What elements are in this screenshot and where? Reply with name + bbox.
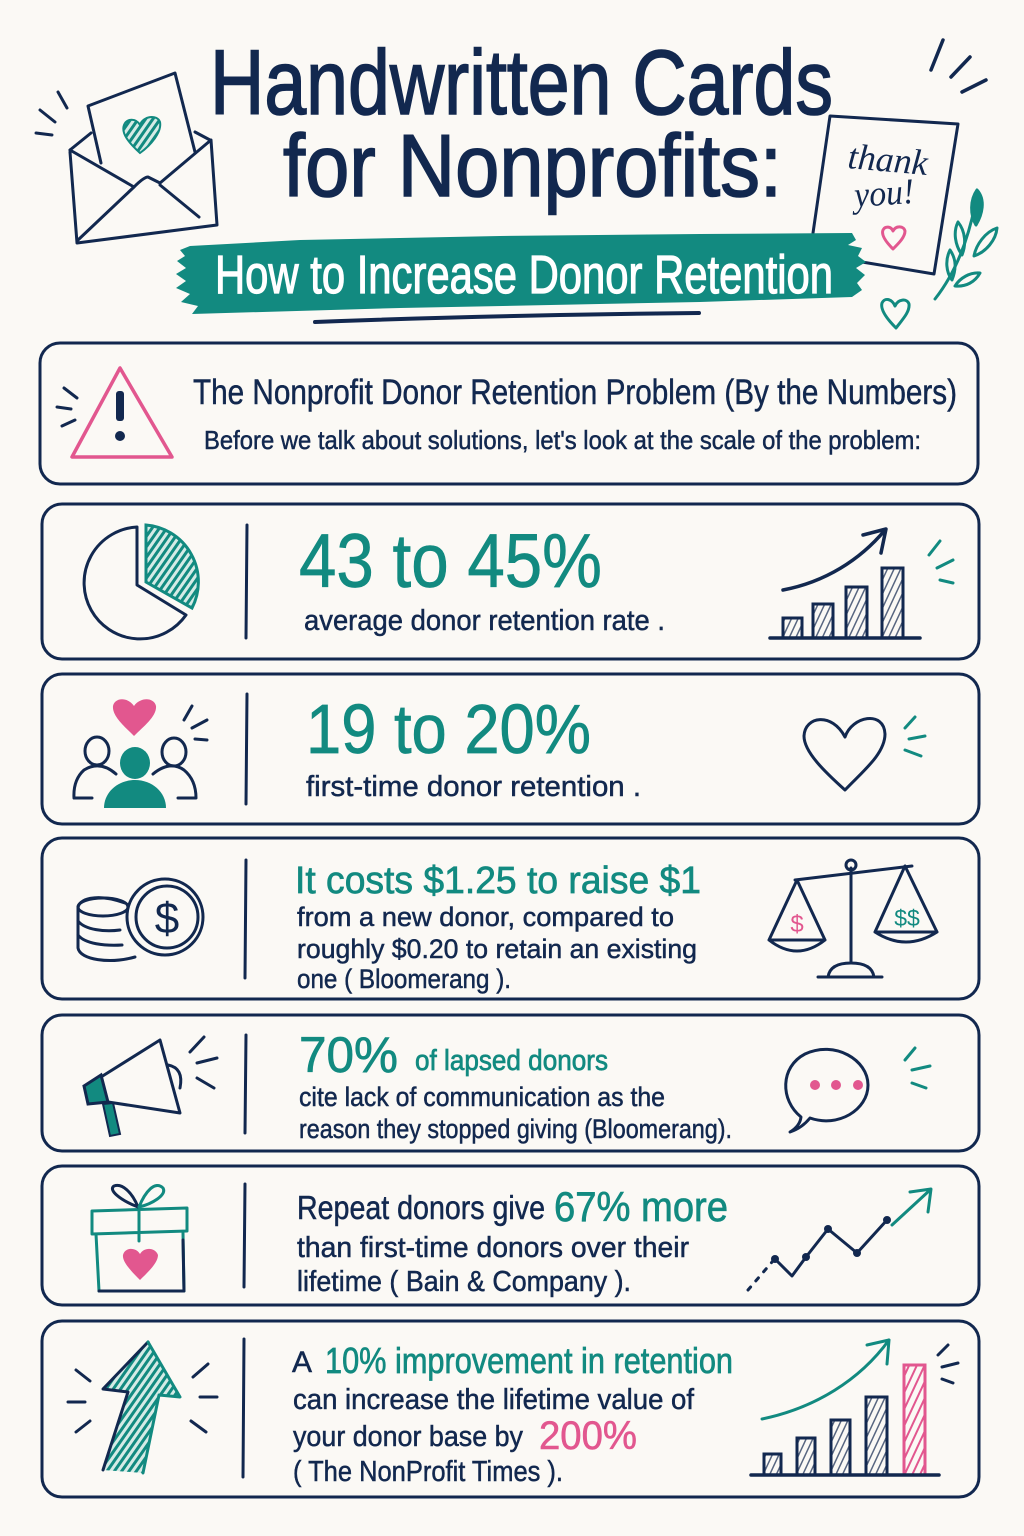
stat: 43 to 45% [299, 519, 602, 604]
stat line: Repeat donors give [297, 1189, 545, 1226]
body text: roughly $0.20 to retain an existing [297, 934, 697, 964]
icon: balance scale: $ [790, 911, 804, 938]
icon: pie chart [84, 525, 198, 639]
icon: thank you card: you! [850, 171, 915, 215]
title: for Nonprofits: [283, 116, 782, 215]
panel: first-time retention [42, 674, 979, 824]
icon: coins [78, 879, 203, 960]
stat heading [299, 1027, 608, 1083]
body text [293, 1384, 695, 1488]
icon: envelope with heart card [36, 73, 217, 243]
icon: leaf branch [935, 190, 997, 299]
icon: megaphone [84, 1037, 217, 1136]
panel: problem intro [40, 343, 978, 484]
icon: line chart [748, 1189, 931, 1290]
panel: ten percent improvement [42, 1321, 979, 1497]
body text: ( The NonProfit Times ). [293, 1456, 563, 1488]
icon: donors with heart [74, 699, 207, 808]
panel: repeat donors [42, 1166, 979, 1305]
icon: balance scale [769, 860, 937, 977]
body text: from a new donor, compared to [297, 902, 674, 932]
body text [297, 902, 697, 994]
icon: bar chart with arrow [751, 1340, 958, 1475]
body text: lifetime ( Bain & Company ). [297, 1266, 631, 1298]
icon: small teal heart [882, 299, 909, 328]
intro text: Before we talk about solutions, let's look at the scale of the problem: [204, 425, 921, 455]
icon: thank you card [813, 116, 958, 274]
body text: reason they stopped giving (Bloomerang). [299, 1114, 732, 1144]
stat heading: It costs $1.25 to raise $1 [295, 860, 701, 902]
icon: big arrow [68, 1342, 217, 1473]
body text [299, 1082, 732, 1144]
stat: 19 to 20% [306, 690, 591, 768]
panel: lapsed donors [42, 1015, 979, 1151]
icon: rising bars [770, 529, 953, 638]
title [210, 32, 833, 215]
icon: gift box [92, 1185, 187, 1291]
sparkles: top right [931, 40, 986, 92]
body text [297, 1232, 689, 1298]
stat heading: 70% [299, 1027, 398, 1083]
icon: thank you card: thank [846, 136, 930, 183]
stat heading: A [292, 1346, 312, 1379]
icon: coins: $ [155, 894, 179, 943]
icon: speech bubble [786, 1048, 930, 1132]
banner: subtitle brush stroke: How to Increase Donor Retention [215, 245, 833, 305]
panel: cost to raise [42, 838, 979, 999]
stat label: average donor retention rate . [304, 605, 665, 637]
banner: subtitle brush stroke [176, 233, 866, 314]
stat heading: of lapsed donors [415, 1045, 608, 1077]
body text: your donor base by [293, 1421, 523, 1453]
underline [315, 313, 699, 322]
stat line [297, 1183, 728, 1230]
body text: can increase the lifetime value of [293, 1384, 695, 1416]
stat line: 67% more [554, 1183, 728, 1230]
body text: cite lack of communication as the [299, 1082, 665, 1112]
body text: 200% [539, 1414, 637, 1458]
stat heading: 10% improvement in retention [325, 1340, 733, 1381]
icon: warning triangle [57, 368, 172, 457]
icon: balance scale: $$ [894, 905, 920, 931]
body text: one ( Bloomerang ). [297, 964, 511, 994]
body text: than first-time donors over their [297, 1232, 689, 1264]
title: Handwritten Cards [210, 32, 833, 134]
panel: average retention [42, 504, 979, 659]
stat label: first-time donor retention . [306, 771, 641, 803]
icon: heart outline [804, 717, 925, 790]
